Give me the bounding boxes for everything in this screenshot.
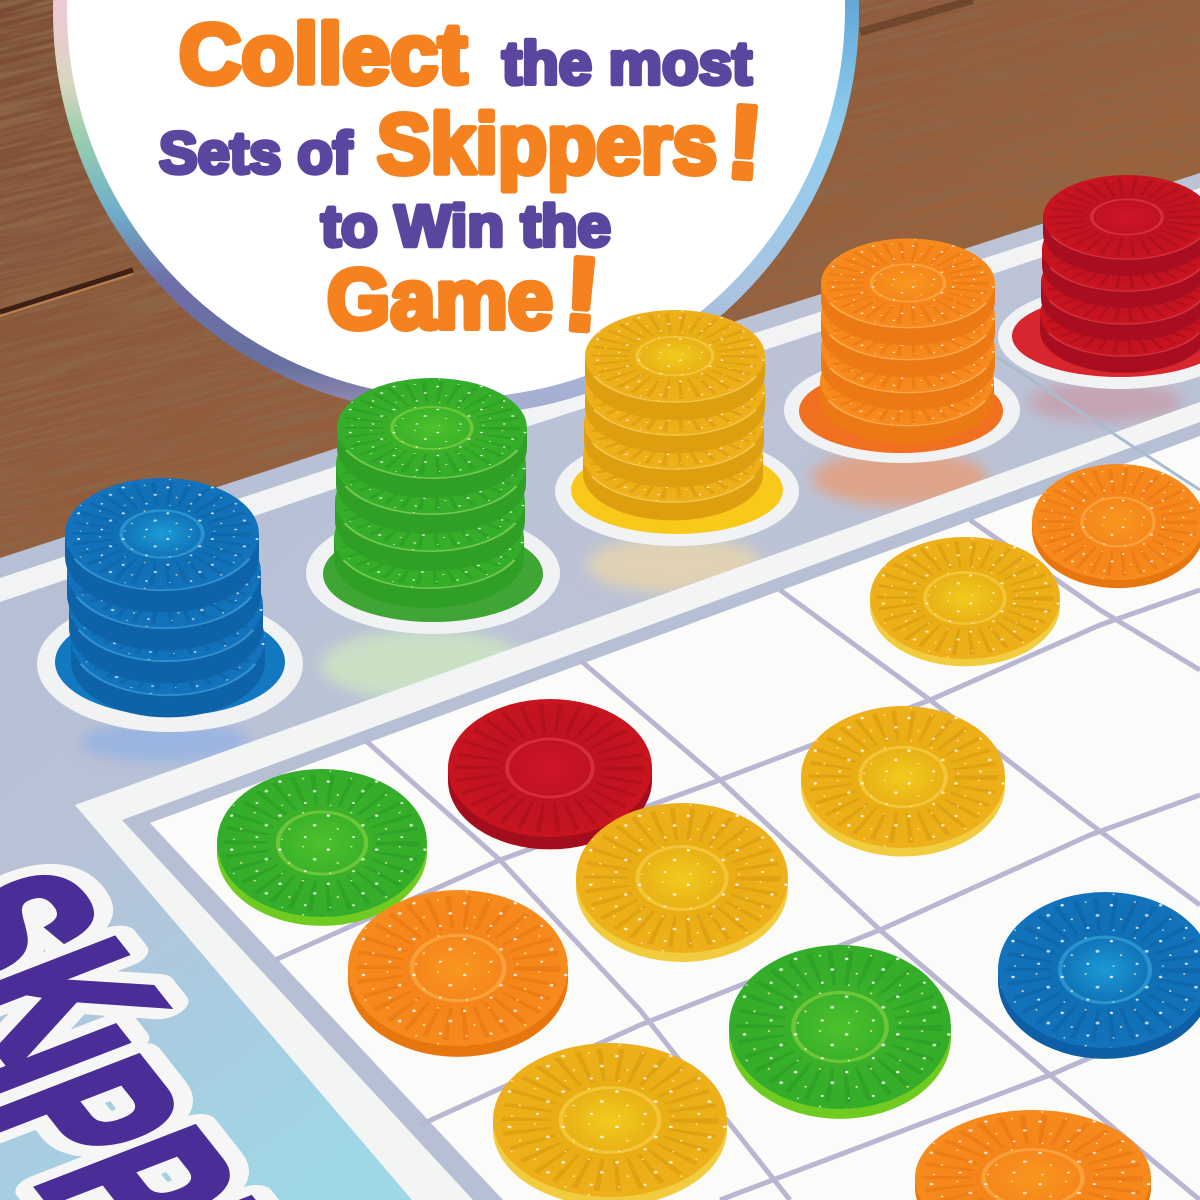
- target circle: yellow: [555, 436, 799, 546]
- stack: yellow skippers: [583, 310, 765, 520]
- chip: red: [448, 699, 652, 849]
- white edge strip: [0, 188, 1200, 602]
- chip: orange bottom right: [915, 1110, 1151, 1200]
- target circle: red: [998, 285, 1200, 389]
- target circle: orange: [784, 357, 1020, 463]
- stack reflections on the board: [80, 382, 1183, 762]
- chip: yellow centre: [576, 803, 788, 962]
- headline: Sets of: [159, 121, 353, 186]
- chip: yellow middle: [801, 706, 1005, 857]
- headline: !: [723, 84, 767, 202]
- grid lines: [275, 357, 1200, 1200]
- target circle: blue: [37, 596, 303, 732]
- chip: blue right: [998, 892, 1200, 1059]
- headline: the most: [502, 30, 752, 97]
- target circle: green: [306, 512, 560, 634]
- chip: orange upper right: [1032, 464, 1200, 588]
- stack: green skippers: [334, 378, 527, 608]
- speech bubble: [53, 0, 859, 415]
- stack: blue skippers: [65, 478, 265, 717]
- headline: !: [560, 236, 604, 354]
- chip: orange lower left: [348, 890, 568, 1057]
- headline: Game: [327, 252, 553, 346]
- headline: Collect: [179, 7, 467, 101]
- chip: green lower: [729, 945, 951, 1119]
- stack: red skippers: [1040, 175, 1200, 373]
- chip: yellow upper: [870, 537, 1060, 666]
- chip: green left: [217, 769, 427, 926]
- stack: orange skippers: [820, 238, 995, 443]
- grid inner holographic border: [122, 422, 1200, 1200]
- white grid frame: [75, 402, 1200, 1200]
- headline: to Win the: [321, 194, 611, 259]
- chip: yellow bottom: [493, 1043, 727, 1200]
- board lower-left blue panel: [0, 760, 420, 1200]
- grid cells: [150, 436, 1200, 1200]
- headline: Skippers: [377, 97, 717, 191]
- headline: [159, 7, 767, 354]
